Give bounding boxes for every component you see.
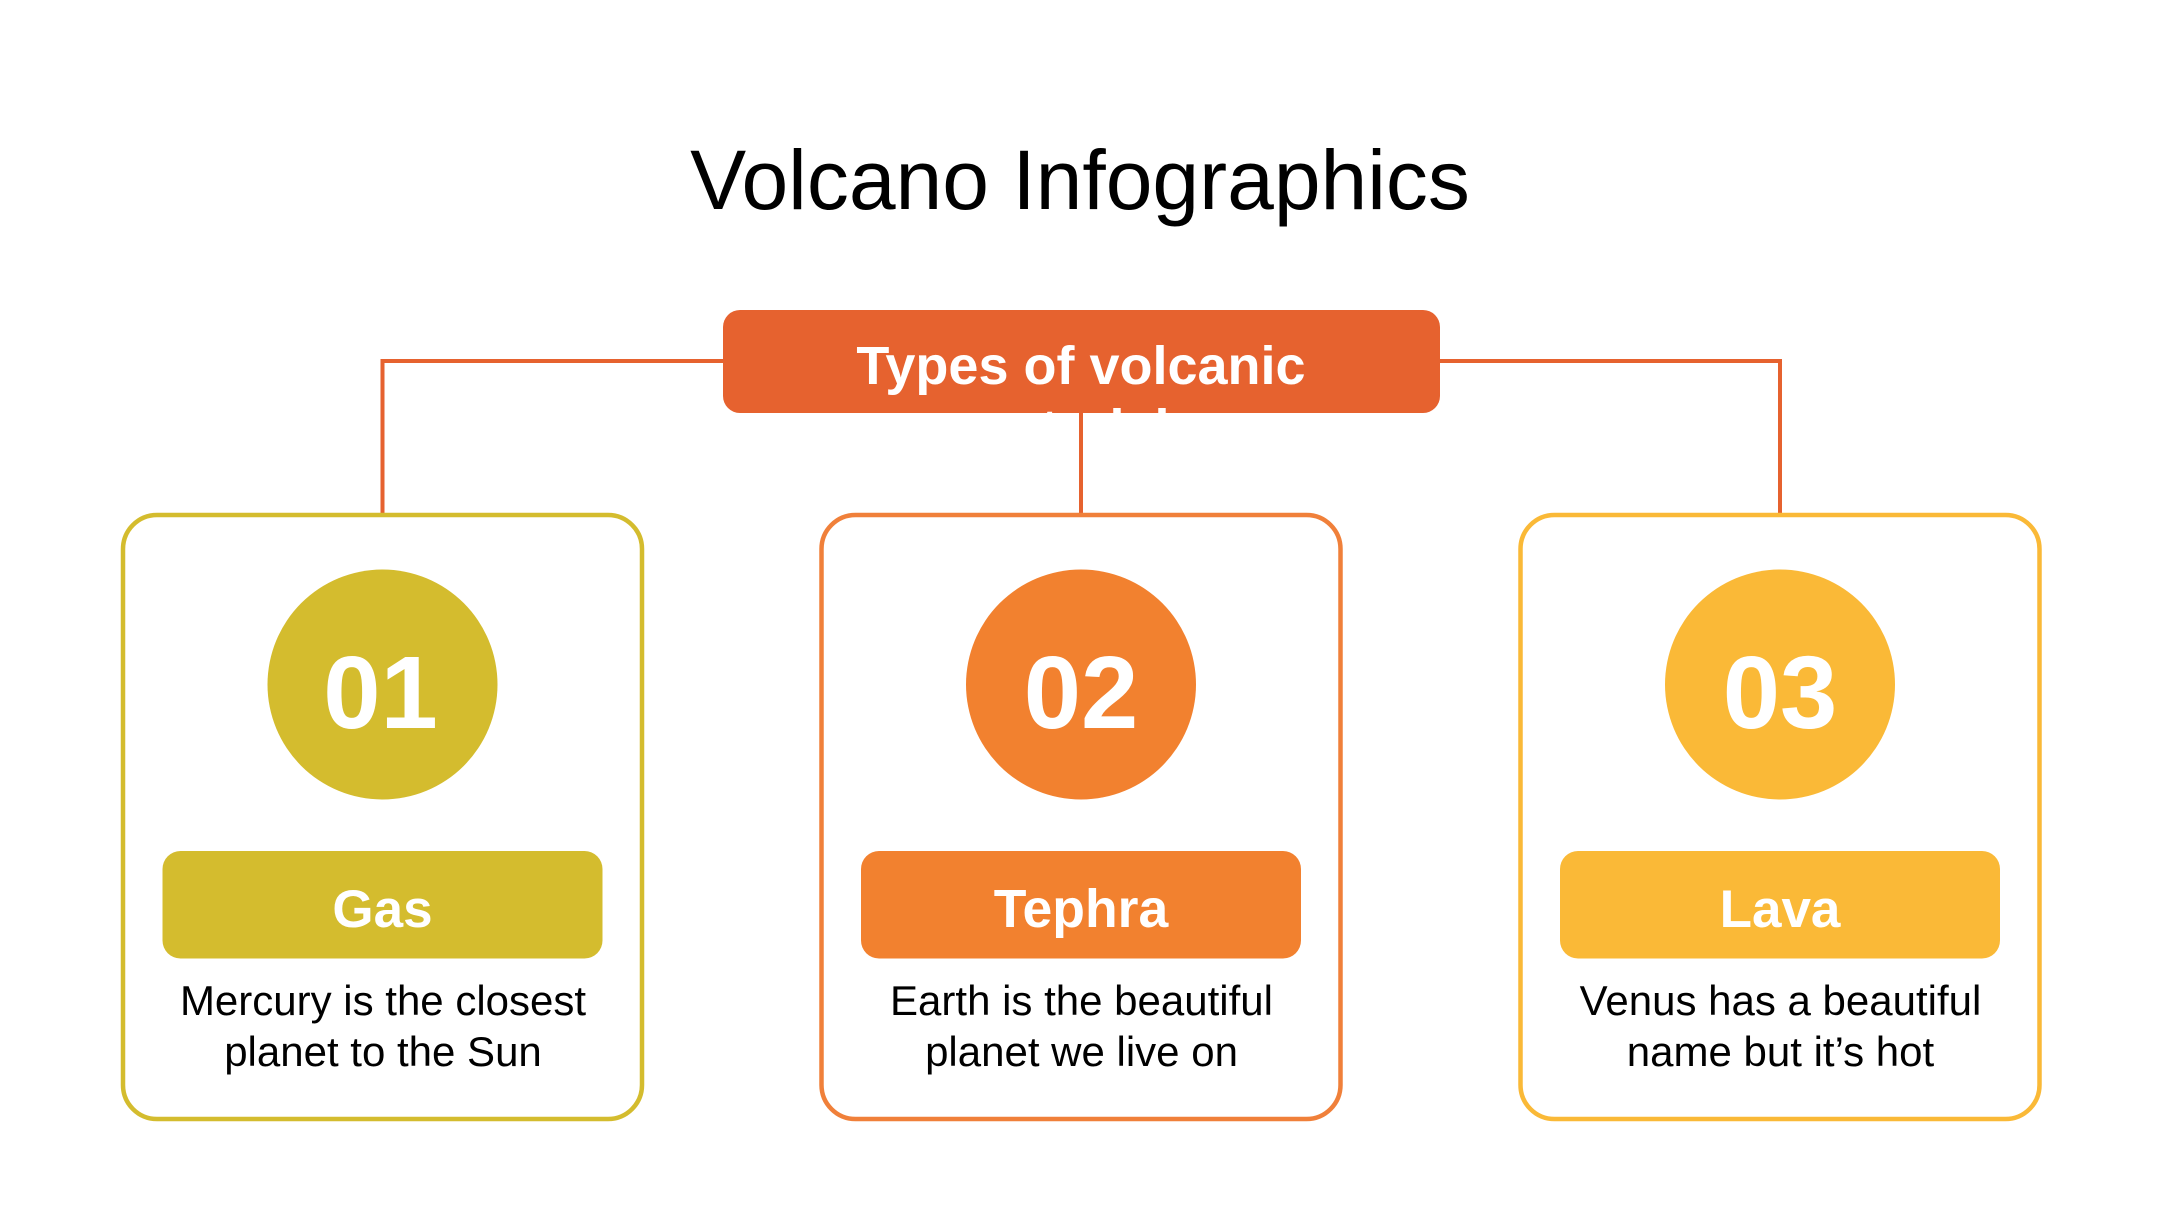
card outline — [123, 515, 642, 1119]
header: types of volcanic materials — [723, 310, 1440, 459]
center connector line — [1079, 413, 1083, 516]
panel: tephra — [822, 515, 1340, 1119]
description: tephra: planet we live on — [925, 1028, 1238, 1075]
number badge 03: 03 — [1723, 635, 1837, 750]
label: lava: Lava — [1720, 880, 1841, 939]
description: tephra: Earth is the beautiful — [890, 977, 1273, 1024]
description: lava: Venus has a beautiful — [1580, 977, 1981, 1024]
label: tephra — [861, 851, 1301, 958]
label: gas: Gas — [332, 880, 433, 939]
number badge 02: 02 — [1024, 635, 1138, 750]
label: lava — [1560, 851, 2000, 958]
label: tephra: Tephra — [994, 880, 1169, 939]
number badge 01: 01 — [323, 635, 438, 750]
card outline — [1520, 515, 2040, 1119]
label: gas — [162, 851, 602, 958]
header: types of volcanic materials: materials — [962, 399, 1200, 459]
panel: gas — [123, 515, 642, 1119]
side connector lines — [382, 361, 1780, 516]
description: lava: name but it’s hot — [1627, 1028, 1935, 1075]
description: tephra — [890, 977, 1273, 1075]
number badge 01 — [268, 570, 498, 800]
panel: lava — [1520, 515, 2040, 1119]
description: lava — [1580, 977, 1981, 1075]
description: gas — [180, 977, 586, 1075]
card outline — [822, 515, 1340, 1119]
description: gas: Mercury is the closest — [180, 977, 586, 1024]
number badge 03 — [1665, 570, 1895, 800]
header: types of volcanic materials: Types of volcanic — [856, 336, 1306, 396]
title: Volcano Infographics — [690, 133, 1470, 227]
description: gas: planet to the Sun — [224, 1028, 542, 1075]
number badge 02 — [966, 570, 1196, 800]
